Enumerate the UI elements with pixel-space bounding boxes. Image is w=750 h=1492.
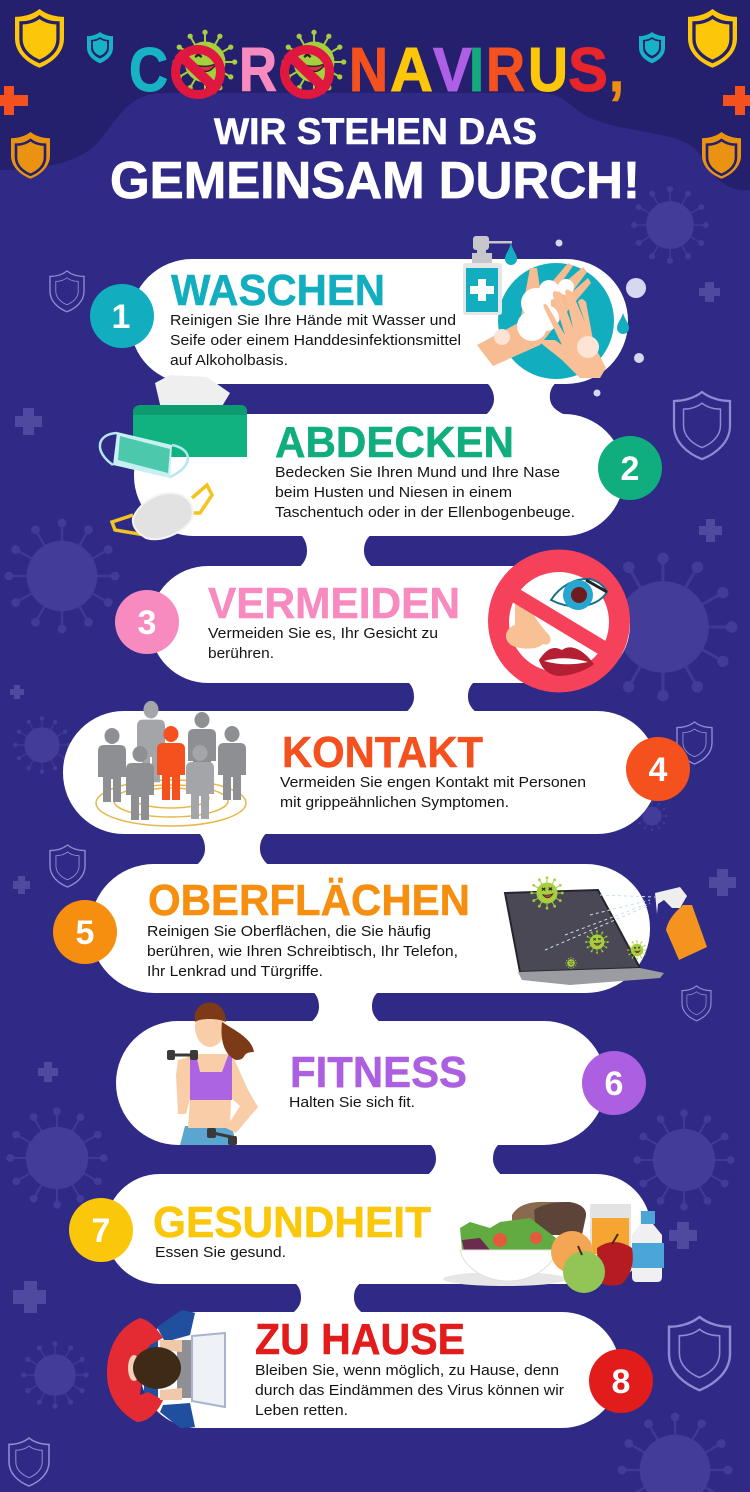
panel: 4 Kontakt (96, 701, 690, 826)
title: Coronavirus: V (433, 36, 472, 105)
title: Coronavirus: R (486, 36, 525, 105)
icon: people keeping distance (96, 701, 246, 826)
body text: Seife oder einem Handdesinfektionsmittel (170, 332, 461, 349)
body text: Leben retten. (255, 1402, 348, 1419)
title: Coronavirus: C (129, 36, 168, 105)
body text (147, 923, 458, 980)
body text: Reinigen Sie Oberflächen, die Sie häufig (147, 923, 431, 940)
heading: VERMEIDEN (208, 579, 460, 628)
body text: Vermeiden Sie es, Ihr Gesicht zu (208, 625, 438, 642)
title: Coronavirus: N (349, 36, 388, 105)
title: Coronavirus: S (568, 36, 608, 105)
decorative outline shields (9, 271, 730, 1486)
white winding ribbon of pills and connectors (63, 259, 658, 1428)
header dark wave (0, 0, 750, 190)
number badge: 6 (605, 1065, 623, 1103)
panel: 5 Oberflächen (53, 876, 707, 985)
number badge (582, 1051, 646, 1115)
panel: 3 Vermeiden (115, 550, 630, 692)
body text: beim Husten und Niesen in einem (275, 484, 512, 501)
heading: FITNESS (290, 1048, 467, 1097)
number badge (90, 284, 154, 348)
icon: washing hands and sanitizer (463, 236, 646, 396)
icon: woman with dumbbells (167, 1002, 258, 1145)
panel: 7 Gesundheit (69, 1198, 664, 1293)
body text: Essen Sie gesund. (155, 1244, 286, 1261)
title: Coronavirus: , (609, 36, 624, 105)
body text (170, 312, 461, 369)
title: Coronavirus: I (469, 36, 484, 105)
icon: laptop and disinfectant spray (505, 876, 707, 985)
body text: Ihr Lenkrad und Türgriffe. (147, 963, 323, 980)
body text: Vermeiden Sie engen Kontakt mit Personen (280, 774, 586, 791)
body text: Bedecken Sie Ihren Mund und Ihre Nase (275, 464, 560, 481)
body text: Halten Sie sich fit. (289, 1094, 415, 1111)
panel: 1 Waschen (90, 236, 646, 396)
number badge (589, 1349, 653, 1413)
icon: person working at laptop from above (107, 1310, 225, 1428)
number badge: 3 (138, 604, 156, 642)
heading: KONTAKT (282, 728, 483, 777)
number badge (115, 590, 179, 654)
icon: no touching face sign (488, 550, 630, 692)
number badge (626, 737, 690, 801)
body text: Bleiben Sie, wenn möglich, zu Hause, denn (255, 1362, 559, 1379)
heading: OBERFLÄCHEN (148, 876, 470, 925)
body text: auf Alkoholbasis. (170, 352, 288, 369)
body text: Taschentuch oder in der Ellenbogenbeuge. (275, 504, 575, 521)
number badge (598, 436, 662, 500)
number badge: 8 (612, 1363, 630, 1401)
decorative crosses (10, 282, 736, 1313)
number badge (53, 900, 117, 964)
body text: berühren, wie Ihren Schreibtisch, Ihr Telefon, (147, 943, 458, 960)
panel: 2 Abdecken (100, 375, 662, 539)
number badge (69, 1198, 133, 1262)
title: Coronavirus: R (239, 36, 277, 105)
body text: berühren. (208, 645, 274, 662)
number badge: 4 (649, 751, 668, 789)
title: Coronavirus: U (528, 36, 568, 105)
body text (275, 464, 575, 521)
heading: ABDECKEN (275, 418, 514, 467)
body text: Reinigen Sie Ihre Hände mit Wasser und (170, 312, 456, 329)
title: Coronavirus: A (390, 36, 433, 105)
heading: WASCHEN (171, 266, 385, 315)
body text: mit grippeähnlichen Symptomen. (280, 794, 509, 811)
title: Coronavirus (129, 30, 624, 105)
number badge: 2 (621, 450, 639, 488)
subtitle line 2: GEMEINSAM DURCH! (110, 152, 640, 210)
body text: durch das Eindämmen des Virus können wir (255, 1382, 564, 1399)
header orange crosses (0, 86, 750, 115)
body text (255, 1362, 564, 1419)
subtitle line 1: WIR STEHEN DAS (214, 111, 537, 152)
number badge: 7 (92, 1212, 110, 1250)
header shield icons (11, 9, 741, 179)
number badge: 5 (76, 914, 94, 952)
heading: ZU HAUSE (255, 1315, 465, 1364)
panel: 8 Zu Hause (107, 1310, 653, 1428)
panel: 6 Fitness (167, 1002, 646, 1145)
icon: tissue box (133, 375, 247, 457)
icon: surgical mask (100, 432, 188, 478)
body text (280, 774, 586, 811)
number badge: 1 (112, 298, 130, 336)
icon: respirator mask (112, 485, 212, 539)
heading: GESUNDHEIT (153, 1198, 431, 1247)
icon: healthy food (443, 1202, 664, 1293)
body text (208, 625, 438, 662)
